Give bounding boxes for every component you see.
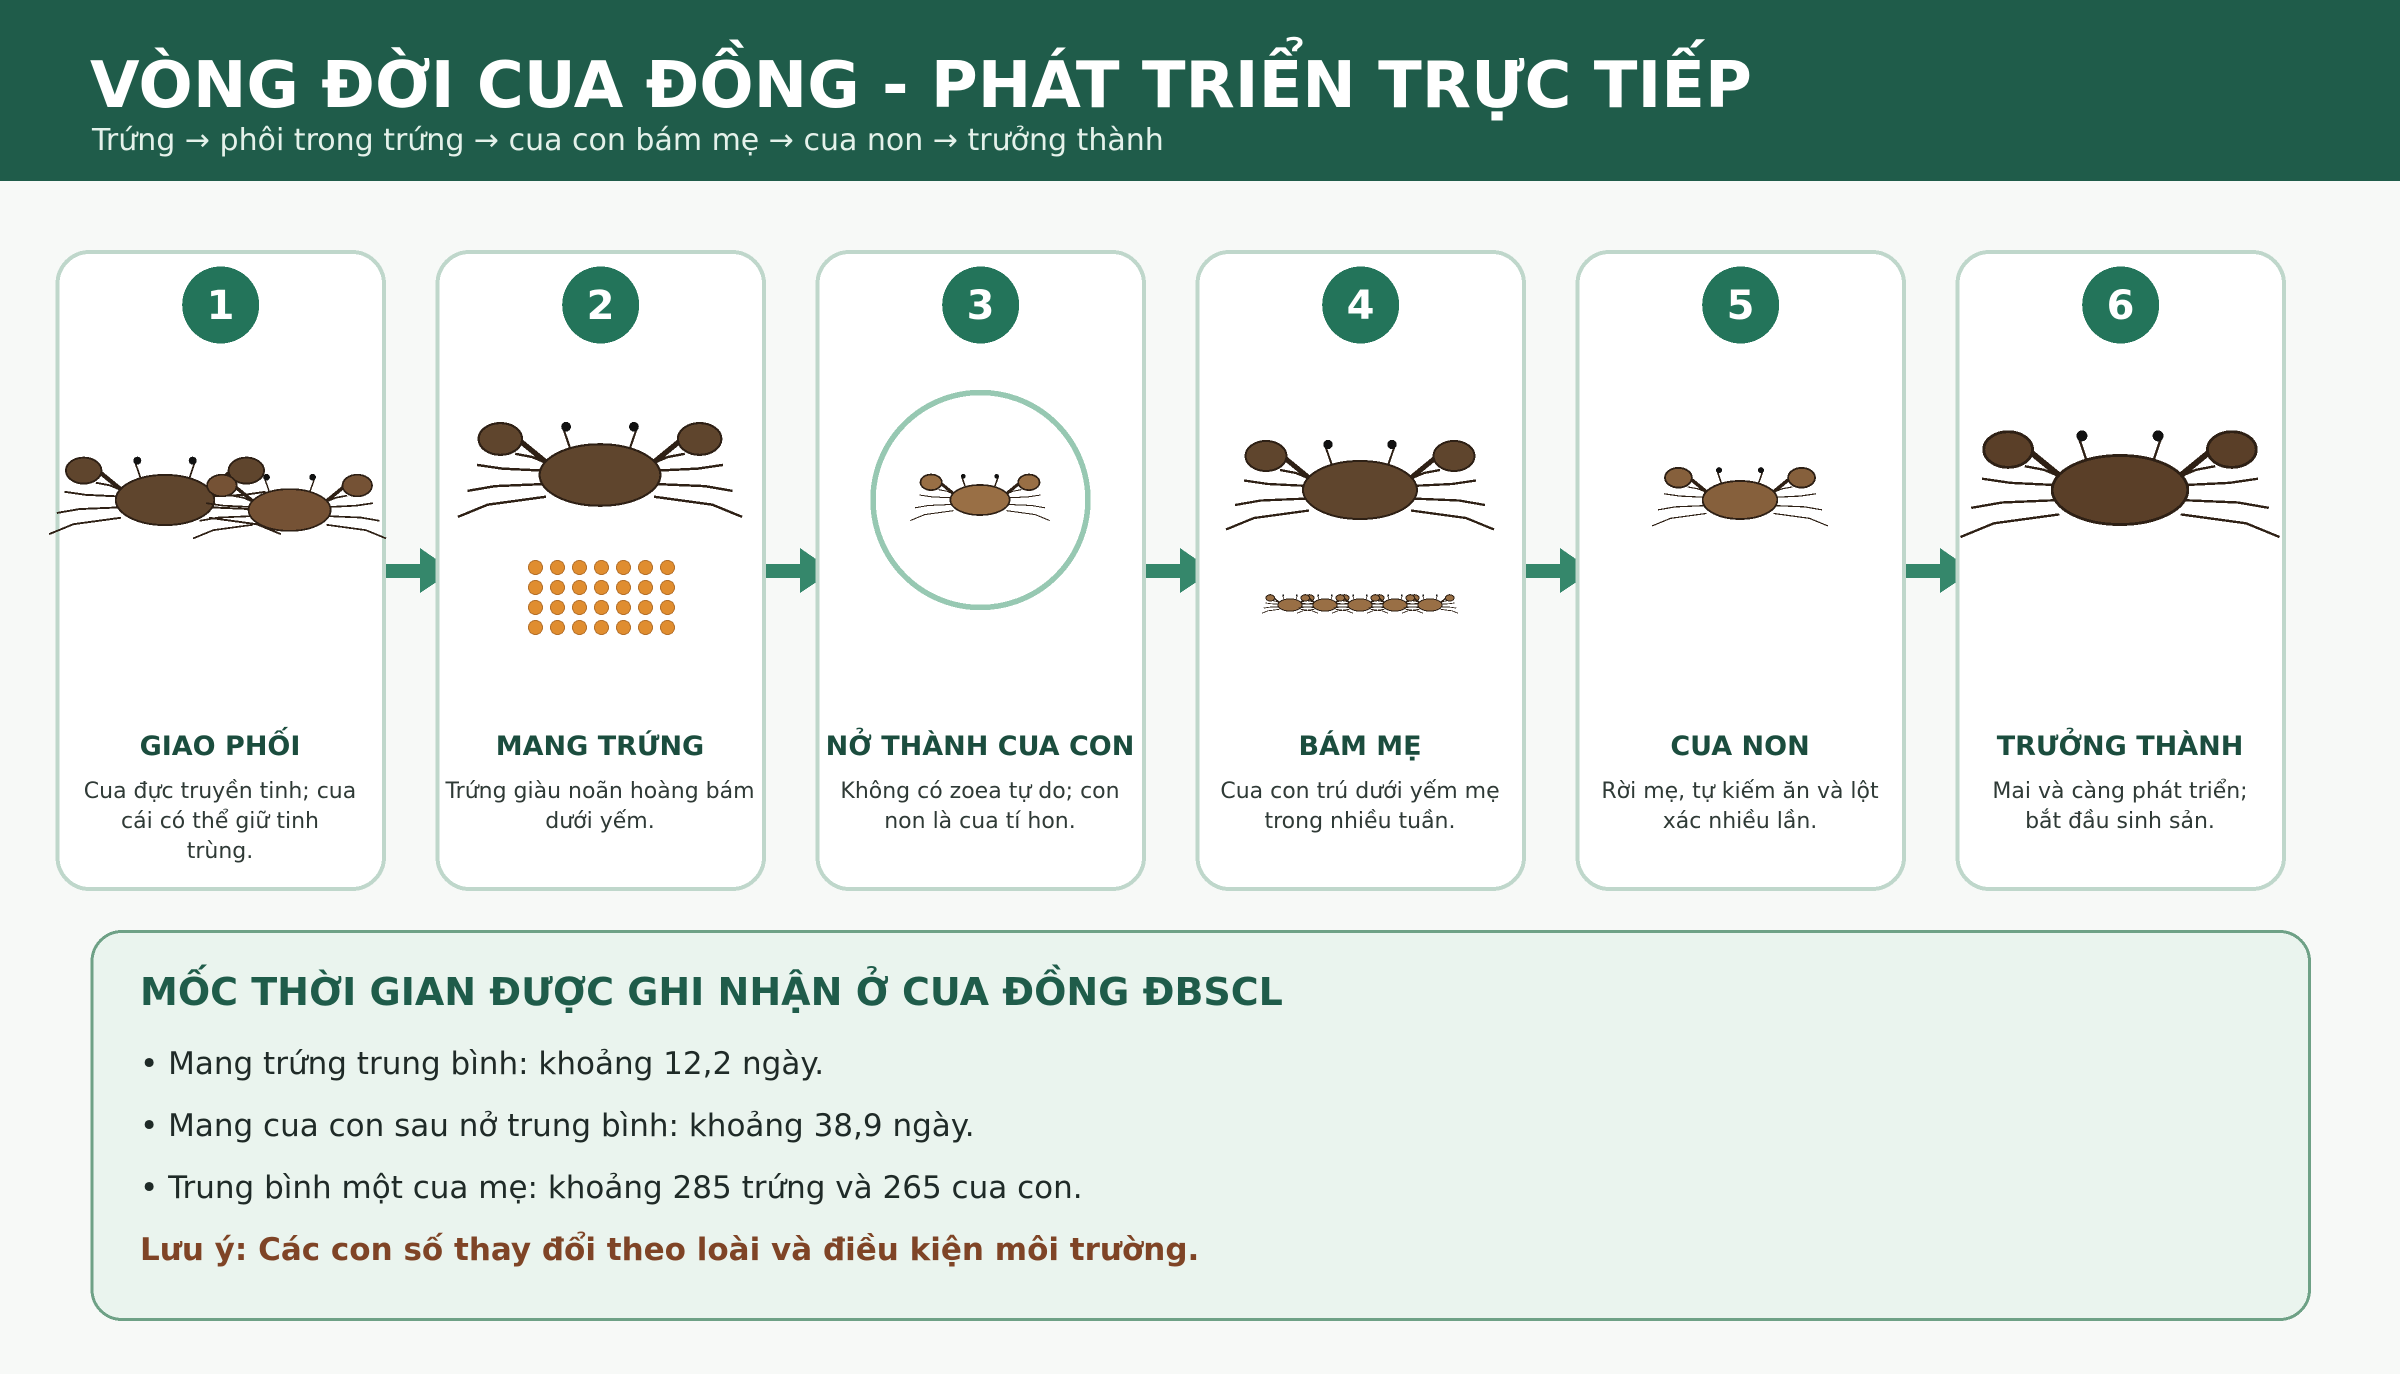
- step number 6: 6: [2107, 283, 2134, 329]
- icon: male crab: [49, 457, 281, 534]
- step 4 description: Cua con trú dưới yếm mẹ: [1220, 779, 1500, 804]
- step 5 description: xác nhiều lần.: [1663, 809, 1817, 834]
- step 2 description: dưới yếm.: [545, 809, 655, 834]
- step number 4: 4: [1347, 283, 1374, 329]
- arrow 4 to 5: [1524, 548, 1593, 593]
- step number 3: [942, 266, 1019, 344]
- panel: step 5 juvenile: [1578, 252, 1904, 889]
- step number 2: 2: [587, 283, 614, 329]
- bullet 2: • Mang cua con sau nở trung bình: khoảng 38,9 ngày.: [140, 1108, 975, 1144]
- step 4 title: BÁM MẸ: [1298, 730, 1422, 762]
- step number 3: 3: [967, 283, 994, 329]
- step 6 description: bắt đầu sinh sản.: [2025, 809, 2215, 834]
- step number 4: [1322, 266, 1399, 344]
- step 1 description: cái có thể giữ tinh: [121, 809, 319, 834]
- icon: female crab with eggs: [458, 422, 742, 517]
- icon: row of baby crabs: [1262, 594, 1458, 613]
- notes heading: MỐC THỜI GIAN ĐƯỢC GHI NHẬN Ở CUA ĐỒNG ĐBSCL: [140, 965, 1283, 1014]
- panel: step 6 adult: [1958, 252, 2284, 889]
- step 4 description: trong nhiều tuần.: [1264, 809, 1456, 834]
- bullet 3: • Trung bình một cua mẹ: khoảng 285 trứng và 265 cua con.: [140, 1170, 1083, 1206]
- icon: mother crab: [1226, 440, 1494, 530]
- step 1 description: Cua đực truyền tinh; cua: [84, 779, 356, 804]
- panel: timeline notes: [92, 932, 2310, 1320]
- step number 6: [2082, 266, 2159, 344]
- step 2 description: Trứng giàu noãn hoàng bám: [444, 779, 755, 804]
- step 3 description: Không có zoea tự do; con: [840, 779, 1120, 804]
- panel: step 1 mating: [49, 252, 386, 889]
- title: VÒNG ĐỜI CUA ĐỒNG - PHÁT TRIỂN TRỰC TIẾP: [90, 36, 1752, 123]
- step 5 title: CUA NON: [1670, 731, 1810, 762]
- arrow 3 to 4: [1144, 548, 1213, 593]
- step 5 description: Rời mẹ, tự kiếm ăn và lột: [1601, 779, 1879, 804]
- step 2 title: MANG TRỨNG: [496, 730, 704, 762]
- caution note: Lưu ý: Các con số thay đổi theo loài và điều kiện môi trường.: [140, 1232, 1199, 1268]
- panel: step 2 carrying eggs: [438, 252, 764, 889]
- header band: [0, 0, 2400, 181]
- icon: egg outline ring: [873, 392, 1088, 608]
- step 1 title: GIAO PHỐI: [140, 726, 300, 762]
- icon: adult crab: [1961, 430, 2279, 537]
- panel: step 3 hatching: [818, 252, 1144, 889]
- bullet 1: • Mang trứng trung bình: khoảng 12,2 ngày.: [140, 1046, 824, 1082]
- step number 5: 5: [1727, 283, 1754, 329]
- icon: juvenile crab: [1652, 467, 1828, 526]
- arrow 1 to 2: [384, 548, 453, 593]
- step 3 description: non là cua tí hon.: [884, 809, 1076, 834]
- step number 5: [1702, 266, 1779, 344]
- subtitle: Trứng → phôi trong trứng → cua con bám mẹ → cua non → trưởng thành: [91, 123, 1164, 158]
- icon: egg cluster: [528, 560, 674, 634]
- step 3 title: NỞ THÀNH CUA CON: [826, 726, 1134, 762]
- step 1 description: trùng.: [187, 839, 253, 864]
- arrow 2 to 3: [764, 548, 833, 593]
- icon: tiny crab in egg: [910, 474, 1050, 521]
- icon: female crab: [193, 474, 386, 538]
- step 6 title: TRƯỞNG THÀNH: [1997, 726, 2243, 762]
- step 6 description: Mai và càng phát triển;: [1992, 779, 2248, 804]
- step number 1: [182, 266, 259, 344]
- arrow 5 to 6: [1904, 548, 1973, 593]
- step number 1: 1: [207, 283, 234, 329]
- panel: step 4 clinging to mother: [1198, 252, 1524, 889]
- step number 2: [562, 266, 639, 344]
